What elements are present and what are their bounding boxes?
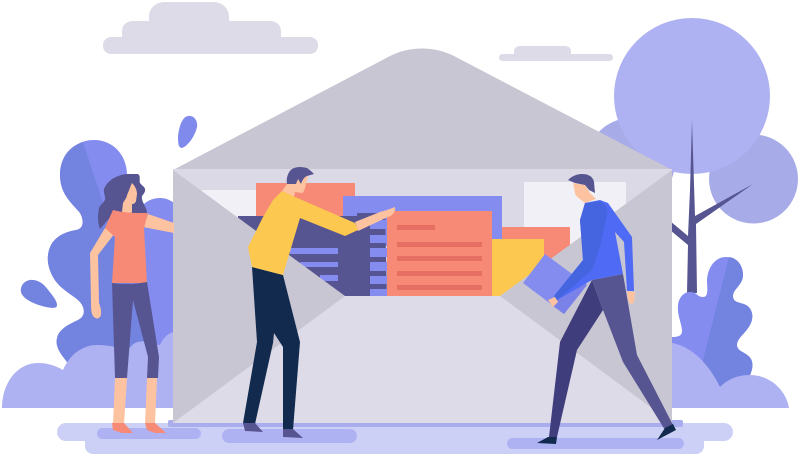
woman face and neck (122, 183, 137, 214)
bush: right front (672, 343, 789, 408)
ground (57, 423, 733, 454)
tree crowns (587, 18, 798, 224)
man 2 sleeve shading (554, 201, 608, 300)
man 1 hair (287, 167, 314, 184)
envelope right fold (500, 170, 672, 423)
envelope interior (173, 169, 672, 423)
man 1 shirt (248, 191, 358, 275)
woman left arm (90, 228, 115, 318)
paper: orange back left (256, 183, 355, 223)
woman right arm (143, 214, 174, 233)
envelope front panel (173, 296, 672, 423)
woman leggings (112, 282, 159, 378)
man 1 trousers (243, 267, 300, 430)
man 2 sweater (554, 200, 634, 300)
envelope flap (173, 48, 672, 170)
paper: orange with lines (387, 211, 492, 296)
woman shirt (105, 210, 148, 283)
bush: left front (2, 332, 174, 408)
envelope base strip (168, 420, 683, 427)
tree trunk (670, 120, 753, 293)
man 2 shoes (537, 424, 676, 444)
bush: right (672, 257, 752, 392)
paper: orange back right (502, 227, 570, 287)
envelope (168, 48, 683, 427)
droplet: top (178, 116, 197, 148)
paper: white left (202, 190, 270, 220)
woman shoes (112, 423, 166, 433)
paper: navy with rows (238, 213, 387, 296)
man 1 shoes (243, 423, 303, 438)
man 1 head (282, 175, 308, 197)
cloud: large (103, 2, 318, 54)
man 2 back leg (549, 280, 603, 437)
woman legs (113, 378, 157, 424)
envelope left fold (173, 170, 345, 423)
documents (202, 182, 626, 296)
man 2 hands (548, 291, 635, 307)
shadow: man with yellow shirt (222, 429, 357, 443)
man 2 hair (568, 174, 595, 193)
tree (587, 18, 798, 293)
bush: left (48, 140, 174, 362)
man in blue sweater (523, 174, 676, 444)
man 2 front leg (592, 274, 673, 430)
paper: yellow (492, 239, 544, 296)
paper: white right (524, 182, 626, 282)
shadow: man with blue sweater (507, 438, 684, 449)
man 2 head and neck (573, 183, 596, 203)
man in yellow shirt (243, 167, 395, 438)
cloud: small (499, 46, 613, 61)
droplet: left (21, 280, 57, 308)
woman (90, 174, 174, 433)
held paper (523, 254, 587, 314)
paper: periwinkle (343, 196, 502, 246)
shadow: woman (97, 428, 201, 439)
man 1 hand (355, 207, 395, 231)
woman hair (98, 174, 147, 229)
